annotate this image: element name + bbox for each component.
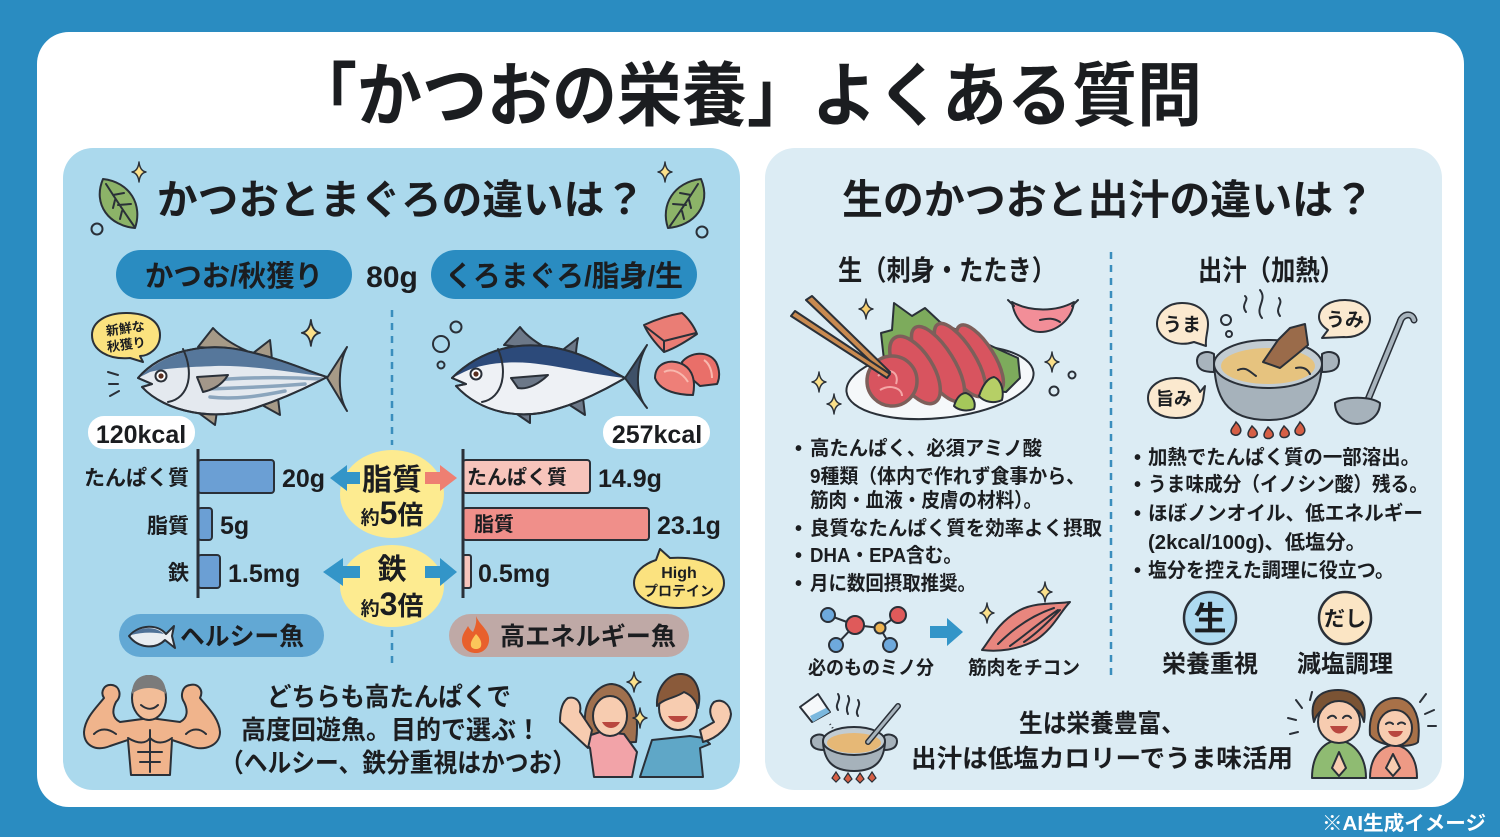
title: 「かつおの栄養」よくある質問 (292, 57, 1202, 135)
pill: healthy fish (119, 614, 324, 657)
illustration: ladle (1335, 315, 1414, 424)
text: right takeaway: 生は栄養豊富、 (1019, 710, 1185, 738)
badge: salt-reduced cooking: だし (1324, 608, 1366, 631)
illustration: skipjack (108, 328, 347, 425)
badge: nutrition focus: 栄養重視 (1162, 651, 1258, 678)
text: raw bullets: • (795, 573, 802, 595)
bar chart: katsuo: 1.5mg (228, 560, 300, 588)
text: raw bullets: 良質なたんぱく質を効率よく摂取 (810, 517, 1102, 540)
text: raw bullets: 月に数回摂取推奨。 (810, 572, 976, 595)
text: right takeaway (911, 710, 1293, 773)
arrow: molecule to muscle (930, 618, 963, 646)
heading: raw vs dashi: 生のかつおと出汁の違いは？ (842, 177, 1374, 223)
text: raw bullets: • (795, 545, 802, 567)
label: 80g: 80g (366, 261, 418, 294)
text: raw bullets: 9種類（体内で作れず食事から、 (810, 465, 1085, 488)
column divider (1110, 252, 1112, 680)
text: raw bullets: 高たんぱく、必須アミノ酸 (810, 437, 1042, 460)
callout: umami (1148, 378, 1205, 418)
callout: fresh autumn catch (92, 313, 160, 362)
footnote: AI image notice: ※AI生成イメージ (1322, 811, 1486, 835)
illustration: grateful couple (1288, 690, 1436, 778)
illustration: sashimi plate (791, 296, 1076, 428)
icon: left leaf (92, 162, 146, 234)
text: dashi bullets: • (1134, 474, 1141, 496)
bar chart: katsuo: 鉄 (168, 562, 189, 585)
pill: high energy fish: 高エネルギー魚 (500, 623, 676, 651)
text: dashi bullets: • (1134, 560, 1141, 582)
illustration: seasoning a pot (800, 694, 898, 783)
callout: iron 3x: 約3倍 (361, 586, 423, 622)
label: to muscle: 筋肉をチコン (968, 657, 1080, 679)
bar chart: maguro: たんぱく質 (467, 466, 567, 489)
bar chart: maguro (463, 449, 721, 598)
callout: High protein (634, 549, 724, 608)
pill: katsuo (116, 250, 352, 299)
illustration: dashi pot (1197, 290, 1339, 439)
badge: 257kcal: 257kcal (612, 421, 702, 449)
subheading: dashi: 出汁（加熱） (1198, 255, 1344, 286)
text: right takeaway: 出汁は低塩カロリーでうま味活用 (911, 745, 1293, 773)
subheading: raw: 生（刺身・たたき） (838, 255, 1056, 286)
pill: kuromaguro (431, 250, 697, 299)
panel: katsuo vs maguro (63, 148, 740, 790)
badge: nutrition focus: 生 (1194, 600, 1226, 637)
callout: High protein: プロテイン (644, 583, 714, 599)
text: raw bullets: • (795, 518, 802, 540)
badge: salt-reduced cooking: 減塩調理 (1297, 651, 1393, 678)
callout: fat 5x: 脂質 (362, 464, 422, 497)
bar chart: katsuo (84, 449, 325, 598)
bar chart: maguro: 0.5mg (478, 560, 550, 588)
callout: umi (1319, 300, 1370, 338)
text: raw bullets: DHA・EPA含む。 (810, 544, 962, 567)
text: dashi bullets: ほぼノンオイル、低エネルギー (1148, 502, 1423, 525)
bar chart: katsuo: 20g (282, 465, 325, 493)
text: raw bullets: • (795, 438, 802, 460)
bar chart: katsuo: 5g (220, 512, 249, 540)
bar chart: maguro: 14.9g (598, 465, 662, 493)
bar chart: katsuo: たんぱく質 (84, 467, 189, 490)
icon: muscle (980, 582, 1070, 651)
icon: amino acid molecule (821, 607, 906, 652)
text: raw bullets (795, 437, 1102, 595)
text: dashi bullets: うま味成分（イノシン酸）残る。 (1148, 472, 1428, 496)
bar chart: maguro: 23.1g (657, 512, 721, 540)
panel: raw vs dashi (765, 148, 1442, 790)
badge: nutrition focus (1162, 592, 1258, 678)
pill: healthy fish: ヘルシー魚 (180, 623, 304, 651)
text: raw bullets: 筋肉・血液・皮膚の材料）。 (810, 489, 1042, 512)
text: left takeaway (220, 682, 576, 778)
pill: kuromaguro: くろまぐろ/脂身/生 (445, 260, 683, 293)
pill: katsuo: かつお/秋獲り (145, 260, 323, 293)
bar chart: maguro: 脂質 (474, 513, 514, 536)
centre divider lower (391, 630, 393, 665)
callout: fresh autumn catch: 秋獲り (106, 334, 147, 355)
text: dashi bullets (1134, 446, 1428, 582)
illustration: muscular man (84, 675, 220, 775)
text: left takeaway: （ヘルシー、鉄分重視はかつお） (220, 748, 576, 778)
illustration: tuna blocks (644, 313, 719, 395)
text: left takeaway: どちらも高たんぱくで (267, 682, 511, 712)
illustration: bluefin tuna (433, 322, 647, 423)
callout: umi: うみ (1326, 310, 1364, 331)
label: amino acids: 必のものミノ分 (808, 657, 934, 679)
callout: umami: 旨み (1156, 389, 1192, 409)
callout: High protein: High (661, 565, 697, 582)
bar chart: katsuo: 脂質 (147, 515, 189, 538)
illustration: smiling couple (560, 672, 731, 777)
pill: high energy fish (449, 614, 689, 657)
callout: fresh autumn catch: 新鮮な (105, 318, 146, 339)
callout: fat 5x (330, 450, 457, 538)
icon: mouth (1008, 300, 1078, 332)
badge: 120kcal: 120kcal (96, 421, 186, 449)
callout: fat 5x: 約5倍 (361, 495, 423, 531)
text: left takeaway: 高度回遊魚。目的で選ぶ！ (241, 715, 541, 745)
text: dashi bullets: (2kcal/100g)、低塩分。 (1148, 531, 1366, 554)
callout: iron 3x (323, 545, 457, 627)
text: dashi bullets: 塩分を控えた調理に役立つ。 (1148, 559, 1394, 582)
icon: sparkle (302, 320, 320, 346)
text: dashi bullets: • (1134, 447, 1141, 469)
icon: right leaf (658, 162, 708, 238)
callout: uma: うま (1163, 315, 1201, 336)
text: dashi bullets: • (1134, 503, 1141, 525)
text: dashi bullets: 加熱でたんぱく質の一部溶出。 (1148, 446, 1420, 469)
badge: salt-reduced cooking (1297, 592, 1393, 678)
callout: iron 3x: 鉄 (377, 553, 407, 586)
callout: uma (1157, 303, 1208, 346)
heading: katsuo vs maguro: かつおとまぐろの違いは？ (157, 177, 645, 223)
centre divider upper (391, 310, 393, 445)
